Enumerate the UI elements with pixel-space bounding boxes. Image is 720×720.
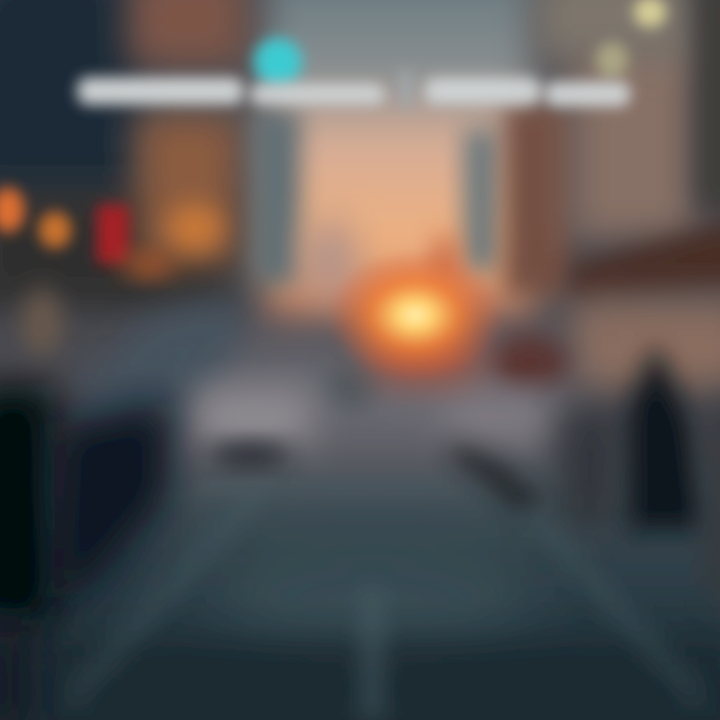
street lights on the left (0, 188, 174, 356)
left foreground silhouettes (0, 385, 170, 720)
right foreground silhouettes (560, 345, 720, 600)
title (illegible in the blurred reference) (78, 70, 630, 108)
sunset glow (304, 218, 503, 382)
road lane markings (70, 490, 700, 720)
cyan title icon (254, 38, 302, 86)
crowd and cars (70, 295, 568, 510)
left buildings (0, 0, 300, 310)
right buildings (464, 0, 720, 390)
